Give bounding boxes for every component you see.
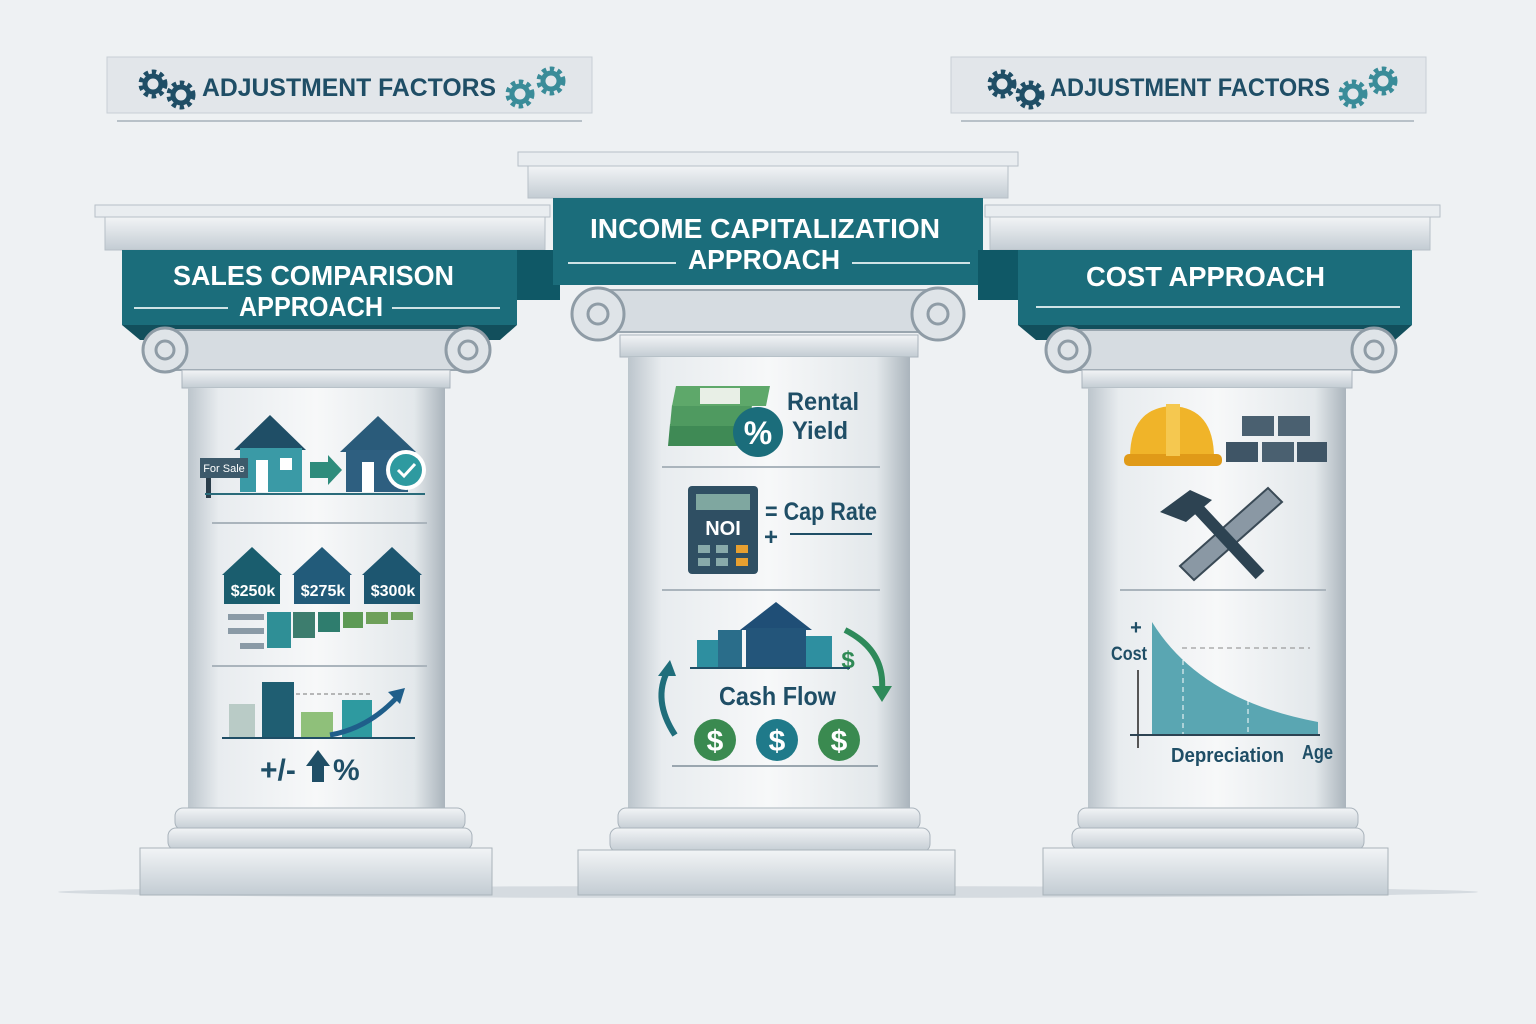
icon: houses comparison bbox=[200, 415, 426, 498]
banner: adjustment factors right: ADJUSTMENT FACTORS bbox=[1050, 74, 1330, 102]
chart: depreciation: Depreciation bbox=[1171, 745, 1284, 767]
pillar: cost approach: COST APPROACH bbox=[1086, 261, 1325, 292]
banner: adjustment factors right bbox=[951, 57, 1426, 121]
ground shadow bbox=[58, 886, 1478, 898]
pillar: sales comparison: APPROACH bbox=[239, 291, 383, 322]
chart: adjustments bbox=[222, 682, 415, 787]
icon: rental yield bbox=[668, 386, 859, 457]
icon: rental yield: % bbox=[744, 415, 772, 451]
banner: adjustment factors left: ADJUSTMENT FACTORS bbox=[202, 74, 496, 102]
pillar: sales comparison: SALES COMPARISON bbox=[173, 260, 454, 291]
icon: rental yield: Rental bbox=[787, 388, 859, 416]
icon: cash flow cycle: $ bbox=[769, 725, 786, 758]
pillar: cost approach bbox=[978, 205, 1440, 895]
banner: adjustment factors left bbox=[107, 57, 592, 121]
pillar: income capitalization: INCOME CAPITALIZATION bbox=[590, 213, 940, 244]
icon: comparable prices: $275k bbox=[301, 583, 345, 600]
pillar: income capitalization: APPROACH bbox=[688, 244, 840, 275]
icon: comparable prices: $300k bbox=[371, 583, 415, 600]
icon: cash flow cycle: $ bbox=[707, 725, 724, 758]
icon: hard hat and bricks bbox=[1124, 404, 1327, 466]
chart: depreciation: Cost bbox=[1111, 644, 1148, 665]
icon: cash flow cycle: $ bbox=[831, 725, 848, 758]
icon: cash flow cycle: Cash Flow bbox=[719, 681, 837, 711]
chart: adjustments: % bbox=[333, 754, 360, 787]
icon: rental yield: Yield bbox=[792, 417, 848, 445]
icon: NOI calculator cap rate bbox=[688, 486, 877, 574]
icon: NOI calculator cap rate: = Cap Rate bbox=[765, 498, 877, 526]
icon: comparable prices bbox=[222, 547, 422, 649]
chart: depreciation: + bbox=[1130, 617, 1142, 639]
icon: cash flow cycle bbox=[658, 602, 892, 766]
icon: hammer and ruler bbox=[1160, 488, 1282, 580]
icon: cash flow cycle: $ bbox=[841, 647, 855, 674]
icon: NOI calculator cap rate: + bbox=[764, 524, 778, 551]
icon: houses comparison: For Sale bbox=[203, 463, 245, 475]
chart: depreciation bbox=[1111, 617, 1333, 767]
chart: depreciation: Age bbox=[1302, 742, 1333, 764]
chart: adjustments: +/- bbox=[260, 754, 296, 787]
pillar: sales comparison bbox=[95, 205, 560, 895]
icon: comparable prices: $250k bbox=[231, 583, 275, 600]
icon: NOI calculator cap rate: NOI bbox=[705, 518, 741, 540]
pillar: income capitalization bbox=[518, 152, 1018, 895]
